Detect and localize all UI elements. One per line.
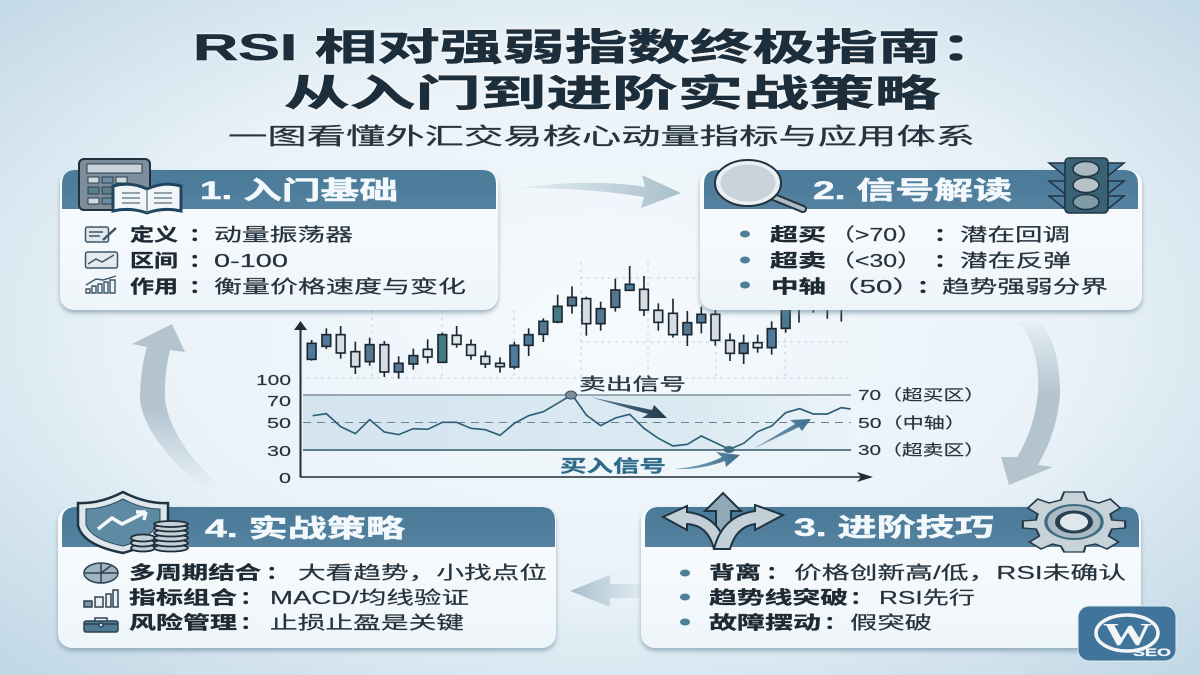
row: indicator combo: MACD/均线验证: [270, 588, 469, 608]
sell arrow: [590, 397, 667, 418]
row: failure swing: [680, 612, 932, 633]
sell signal label: 卖出信号: [579, 375, 686, 394]
right axis labels: [858, 387, 985, 459]
icon: WordPress SEO badge: W: [1103, 616, 1152, 652]
row: overbought: （>70）: [830, 225, 922, 245]
right axis labels: 30（超卖区）: [858, 442, 985, 459]
icon: coin stacks: [131, 521, 188, 552]
flow arrow: step 4 to step 1: [132, 324, 225, 490]
row: risk management: ：: [240, 613, 263, 633]
row: trendline break: ：: [850, 588, 873, 608]
icon: magnifier: [715, 160, 803, 209]
row: multi timeframe: 大看趋势，小找点位: [298, 563, 547, 583]
right axis labels: 70（超买区）: [858, 387, 985, 404]
row: trendline break: 趋势线突破: [709, 587, 848, 608]
RSI level lines: [303, 395, 851, 450]
icon: gear: [1023, 492, 1125, 552]
row: multi timeframe: 多周期结合: [129, 562, 261, 583]
panel 4 card: [58, 507, 556, 648]
chart grid: [300, 262, 850, 378]
row: overbought: [740, 225, 1070, 245]
flow arrow: step 1 to step 2: [518, 175, 681, 208]
row: range: ：: [189, 251, 212, 271]
row: range: 区间: [130, 251, 178, 271]
panel 2 card: [700, 170, 1142, 310]
icon: note and pencil: [86, 227, 116, 242]
row: purpose: 衡量价格速度与变化: [214, 277, 466, 297]
row: midline: 中轴: [771, 277, 826, 297]
candlesticks: [307, 266, 841, 379]
row: divergence: 背离: [709, 562, 761, 583]
flow arrow: step 2 to step 3: [1001, 322, 1060, 485]
row: definition: 动量振荡器: [214, 225, 353, 245]
title: 从入门到进阶实战策略: [284, 73, 940, 114]
RSI zone band: [303, 395, 850, 450]
row: failure swing: 假突破: [850, 613, 932, 633]
row: failure swing: ：: [824, 613, 847, 633]
row: midline: ：: [917, 277, 941, 297]
row: purpose: 作用: [130, 277, 178, 297]
row: purpose: ：: [189, 277, 212, 297]
row: risk management: [129, 612, 464, 633]
panel 3 heading: 3. 进阶技巧: [794, 514, 994, 542]
row: midline: [740, 277, 1108, 297]
row: oversold: 潜在反弹: [960, 251, 1071, 271]
panel 2: signals: [700, 158, 1142, 310]
signal markers: [566, 391, 734, 453]
panel 3: advanced: [641, 492, 1141, 648]
row: midline: 趋势强弱分界: [942, 277, 1108, 297]
flow arrow: step 3 to step 4: [570, 575, 640, 607]
row: trendline break: [680, 587, 975, 608]
left axis labels: [256, 372, 291, 487]
panel 3 card: [641, 507, 1141, 648]
row: range: 0-100: [214, 251, 288, 271]
icon: calculator: [79, 159, 150, 210]
icon: WordPress SEO badge: [1078, 606, 1176, 661]
left axis labels: 50: [267, 415, 291, 432]
subtitle: 一图看懂外汇交易核心动量指标与应用体系: [228, 123, 975, 149]
row: range: [130, 251, 288, 271]
right axis labels: 50（中轴）: [858, 415, 966, 432]
left axis labels: 30: [267, 443, 291, 460]
row: indicator combo: ：: [240, 588, 263, 608]
RSI line: [313, 395, 851, 449]
icon: shield: [78, 492, 168, 553]
row: divergence: 价格创新高/低，RSI未确认: [794, 563, 1126, 583]
icon: branching arrows: [663, 493, 783, 549]
axes: [294, 321, 873, 482]
buy arrow: rebound to midline: [753, 419, 811, 449]
row: overbought: 潜在回调: [960, 225, 1070, 245]
icon: open book: [113, 184, 181, 213]
row: definition: 定义: [130, 224, 178, 245]
title: [193, 27, 1003, 114]
buy arrow: label to marker: [675, 452, 740, 469]
left axis labels: 0: [279, 470, 291, 487]
row: indicator combo: [129, 587, 469, 608]
title: RSI 相对强弱指数终极指南：: [193, 27, 1003, 68]
row: multi timeframe: [129, 562, 547, 583]
row: risk management: 风险管理: [129, 612, 237, 633]
icon: traffic light: [1049, 158, 1124, 213]
row: oversold: （<30）: [830, 251, 922, 271]
row: risk management: 止损止盈是关键: [270, 613, 464, 633]
buy signal label: 买入信号: [560, 457, 666, 476]
left axis labels: 100: [256, 372, 291, 389]
chart: price candlesticks and RSI: [256, 262, 985, 487]
row: failure swing: 故障摆动: [709, 612, 821, 633]
icon: line chart box: [86, 252, 118, 268]
row: indicator combo: 指标组合: [129, 587, 237, 608]
panel 1 card: [60, 170, 498, 310]
icon: bars: [84, 590, 118, 607]
row: definition: ：: [189, 225, 212, 245]
row: trendline break: RSI先行: [879, 588, 975, 608]
row: oversold: ：: [934, 251, 958, 271]
panel 4 heading: 4. 实战策略: [205, 515, 405, 543]
panel 4: strategy: [58, 492, 556, 648]
panel 2 heading: 2. 信号解读: [813, 177, 1012, 205]
row: multi timeframe: ：: [266, 563, 289, 583]
row: divergence: [680, 562, 1126, 583]
row: overbought: ：: [934, 225, 958, 245]
icon: WordPress SEO badge: SEO: [1133, 647, 1172, 659]
row: oversold: [740, 251, 1071, 271]
row: midline: （50）: [830, 277, 922, 297]
row: definition: [130, 224, 353, 245]
left axis labels: 70: [267, 393, 291, 410]
icon: rising bars: [86, 276, 116, 293]
panel 1: basics: [60, 159, 498, 310]
row: divergence: ：: [766, 563, 789, 583]
icon: briefcase: [84, 618, 118, 632]
row: purpose: [130, 277, 466, 297]
icon: cycle pie: [84, 563, 118, 583]
row: oversold: 超卖: [770, 251, 826, 271]
row: overbought: 超买: [770, 225, 826, 245]
panel 1 heading: 1. 入门基础: [200, 177, 398, 205]
